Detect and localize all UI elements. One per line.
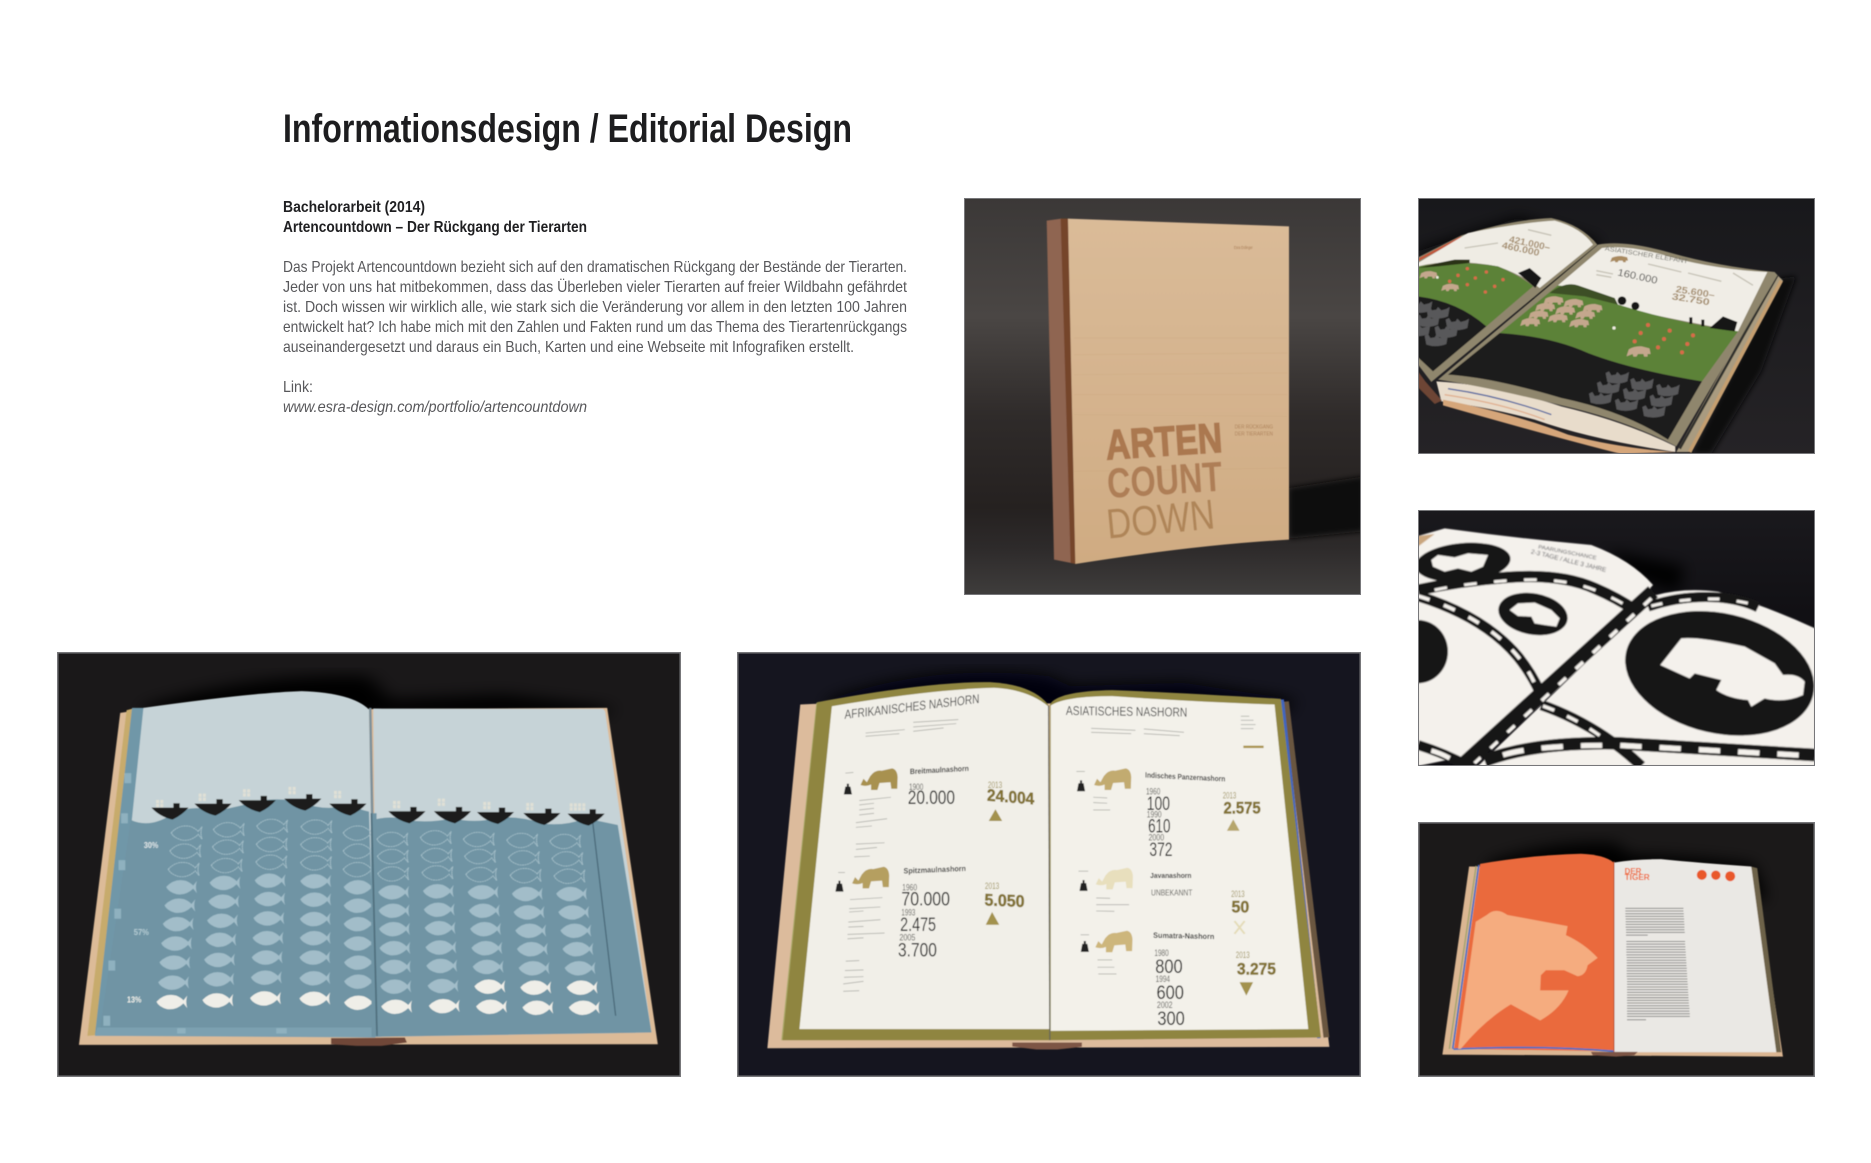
elephant spread text and numbers: ASIATISCHER ELEFANT [1604, 245, 1689, 265]
historical counts [898, 786, 1185, 1030]
elephant herd [1420, 271, 1651, 357]
2013 counts: 2.575 [1224, 799, 1261, 818]
text block: link: Link: [283, 379, 313, 396]
percentage labels: 30% [144, 841, 158, 851]
photo: tiger spread [1418, 822, 1815, 1077]
left page margin [1418, 218, 1597, 382]
years: 2005 [899, 933, 916, 943]
years: 1994 [1156, 975, 1170, 985]
years: 2013 [1223, 792, 1236, 801]
tiger page heading: DER [1625, 867, 1642, 876]
trend markers [986, 809, 1253, 996]
tiger page icons [1697, 870, 1735, 881]
weight icons [835, 780, 1089, 952]
photo: rhino spread: UNBEKANNT [1151, 889, 1192, 898]
historical counts: 610 [1148, 815, 1170, 837]
species names: Breitmaulnashorn [910, 764, 969, 776]
book title on cover: Esra Erdinger [1234, 245, 1253, 250]
photo: rhino spread [737, 652, 1361, 1077]
left margin stripe marks [103, 773, 287, 1033]
historical counts: 70.000 [901, 888, 950, 910]
text block: project subtitle: Artencountdown – Der Rückgang der Tierarten [283, 219, 587, 236]
species names: Indisches Panzernashorn [1145, 770, 1225, 783]
fish white: right page [381, 980, 600, 1015]
gray animal grid [1407, 301, 1680, 418]
red marker dots [1436, 267, 1695, 354]
percentage labels [127, 841, 158, 1005]
road lines [1418, 576, 1815, 766]
historical counts: 2.475 [900, 914, 936, 935]
elephant spread text and numbers: 421.000– [1508, 234, 1551, 253]
years: 2000 [1149, 834, 1164, 843]
elephant spread text and numbers: 32.750 [1671, 291, 1710, 307]
photo: road map spread [1418, 510, 1815, 766]
small caption placeholders [838, 716, 1256, 991]
years: 2013 [1236, 951, 1250, 961]
text block: project description: Jeder von uns hat mitbekommen, dass das Überleben vieler Tierarten auf freier Wildbahn gefährdet [283, 278, 907, 296]
black circles with animal silhouettes [1388, 539, 1827, 753]
species names [904, 764, 1225, 941]
right page illustration [1558, 247, 1767, 331]
book title on cover: DOWN [1104, 490, 1217, 548]
text block: project description: entwickelt hat? Ich habe mich mit den Zahlen und Fakten rund um das Thema des Tierartenrückgangs [283, 319, 907, 336]
fish white: left page [157, 991, 375, 1010]
2013 counts: 5.050 [984, 891, 1025, 911]
species names: Spitzmaulnashorn [904, 864, 966, 875]
tiger silhouette [1458, 911, 1598, 1049]
wood grain [1074, 338, 1287, 471]
photo: book cover [964, 198, 1361, 595]
historical counts: 20.000 [908, 786, 955, 808]
text block: project subtitle: Bachelorarbeit (2014) [283, 199, 425, 216]
photo: fish spread [57, 652, 681, 1077]
elephant spread text and numbers [1501, 234, 1715, 307]
road page caption: PAARUNGSCHANCE [1538, 544, 1597, 562]
percentage labels: 57% [134, 928, 149, 938]
years: 1990 [1147, 810, 1162, 820]
2013 counts: 50 [1232, 899, 1249, 917]
photo: elephant spread [1418, 198, 1815, 454]
ships [151, 794, 605, 826]
road page caption: 2-3 TAGE / ALLE 3 JAHRE [1530, 548, 1607, 574]
percentage labels: 13% [127, 996, 141, 1005]
book title on cover: ARTEN [1104, 414, 1224, 469]
historical counts: 372 [1149, 839, 1173, 861]
historical counts: 800 [1155, 955, 1183, 977]
text block: project description: Das Projekt Artencountdown bezieht sich auf den dramatischen Rückgang der Bestände der Tierarten. [283, 259, 907, 276]
species names: Javanashorn [1150, 871, 1192, 880]
ship cargo [156, 787, 585, 811]
years: 1980 [1154, 949, 1169, 959]
rhino silhouettes [852, 768, 1133, 952]
elephant spread text and numbers: 460.000 [1501, 240, 1540, 258]
title: Informationsdesign / Editorial Design [283, 107, 852, 151]
years: 1993 [901, 908, 916, 918]
fish solid: right page [378, 884, 595, 994]
tiger page heading [1625, 867, 1650, 882]
right page margin [1438, 243, 1777, 446]
years: 1900 [909, 783, 924, 793]
spread headings: AFRIKANISCHES NASHORN [845, 692, 979, 722]
2013 counts: 24.004 [987, 787, 1035, 809]
book title on cover: COUNT [1106, 453, 1224, 507]
text block: link: www.esra-design.com/portfolio/artencountdown [283, 399, 587, 416]
tiger page heading: TIGER [1625, 873, 1650, 882]
fish outlines: left page [168, 819, 374, 877]
species names: Sumatra-Nashorn [1153, 931, 1214, 941]
years: 2013 [985, 882, 999, 892]
spread headings [845, 692, 1187, 722]
historical counts: 300 [1157, 1008, 1185, 1030]
scale legend [1243, 746, 1264, 748]
2013 counts [984, 787, 1276, 979]
fish solid: left page [158, 873, 375, 990]
2013 counts: 3.275 [1237, 961, 1276, 979]
years: 2013 [988, 781, 1002, 791]
years: 2013 [1231, 890, 1245, 900]
text block: project description [283, 259, 907, 356]
historical counts: 600 [1157, 981, 1184, 1003]
years: 2002 [1157, 1001, 1173, 1011]
text block: link [283, 379, 587, 416]
historical counts: 100 [1147, 792, 1170, 814]
book title on cover [1104, 245, 1273, 548]
years: 1960 [902, 884, 917, 893]
text block: project description: ist. Doch wissen wir wirklich alle, wie stark sich die Veränderung vor allem in den letzten 100 Jahren [283, 299, 907, 316]
elephant spread text and numbers: 25.600– [1675, 284, 1715, 300]
text block: project description: auseinandergesetzt und daraus ein Buch, Karten und eine Webseite mit Infografiken erstellt. [283, 339, 854, 356]
text block: project subtitle [283, 199, 587, 236]
fish outlines: right page [377, 831, 585, 883]
book title on cover: DER RÜCKGANG [1235, 424, 1273, 431]
historical counts: 3.700 [898, 939, 937, 961]
book title on cover: DER TIERARTEN [1235, 431, 1273, 437]
years [899, 781, 1250, 1011]
tiger page text columns [1625, 908, 1690, 1020]
years: 1960 [1146, 788, 1160, 797]
elephant spread text and numbers: 160.000 [1616, 268, 1659, 287]
spread headings: ASIATISCHES NASHORN [1066, 704, 1187, 720]
